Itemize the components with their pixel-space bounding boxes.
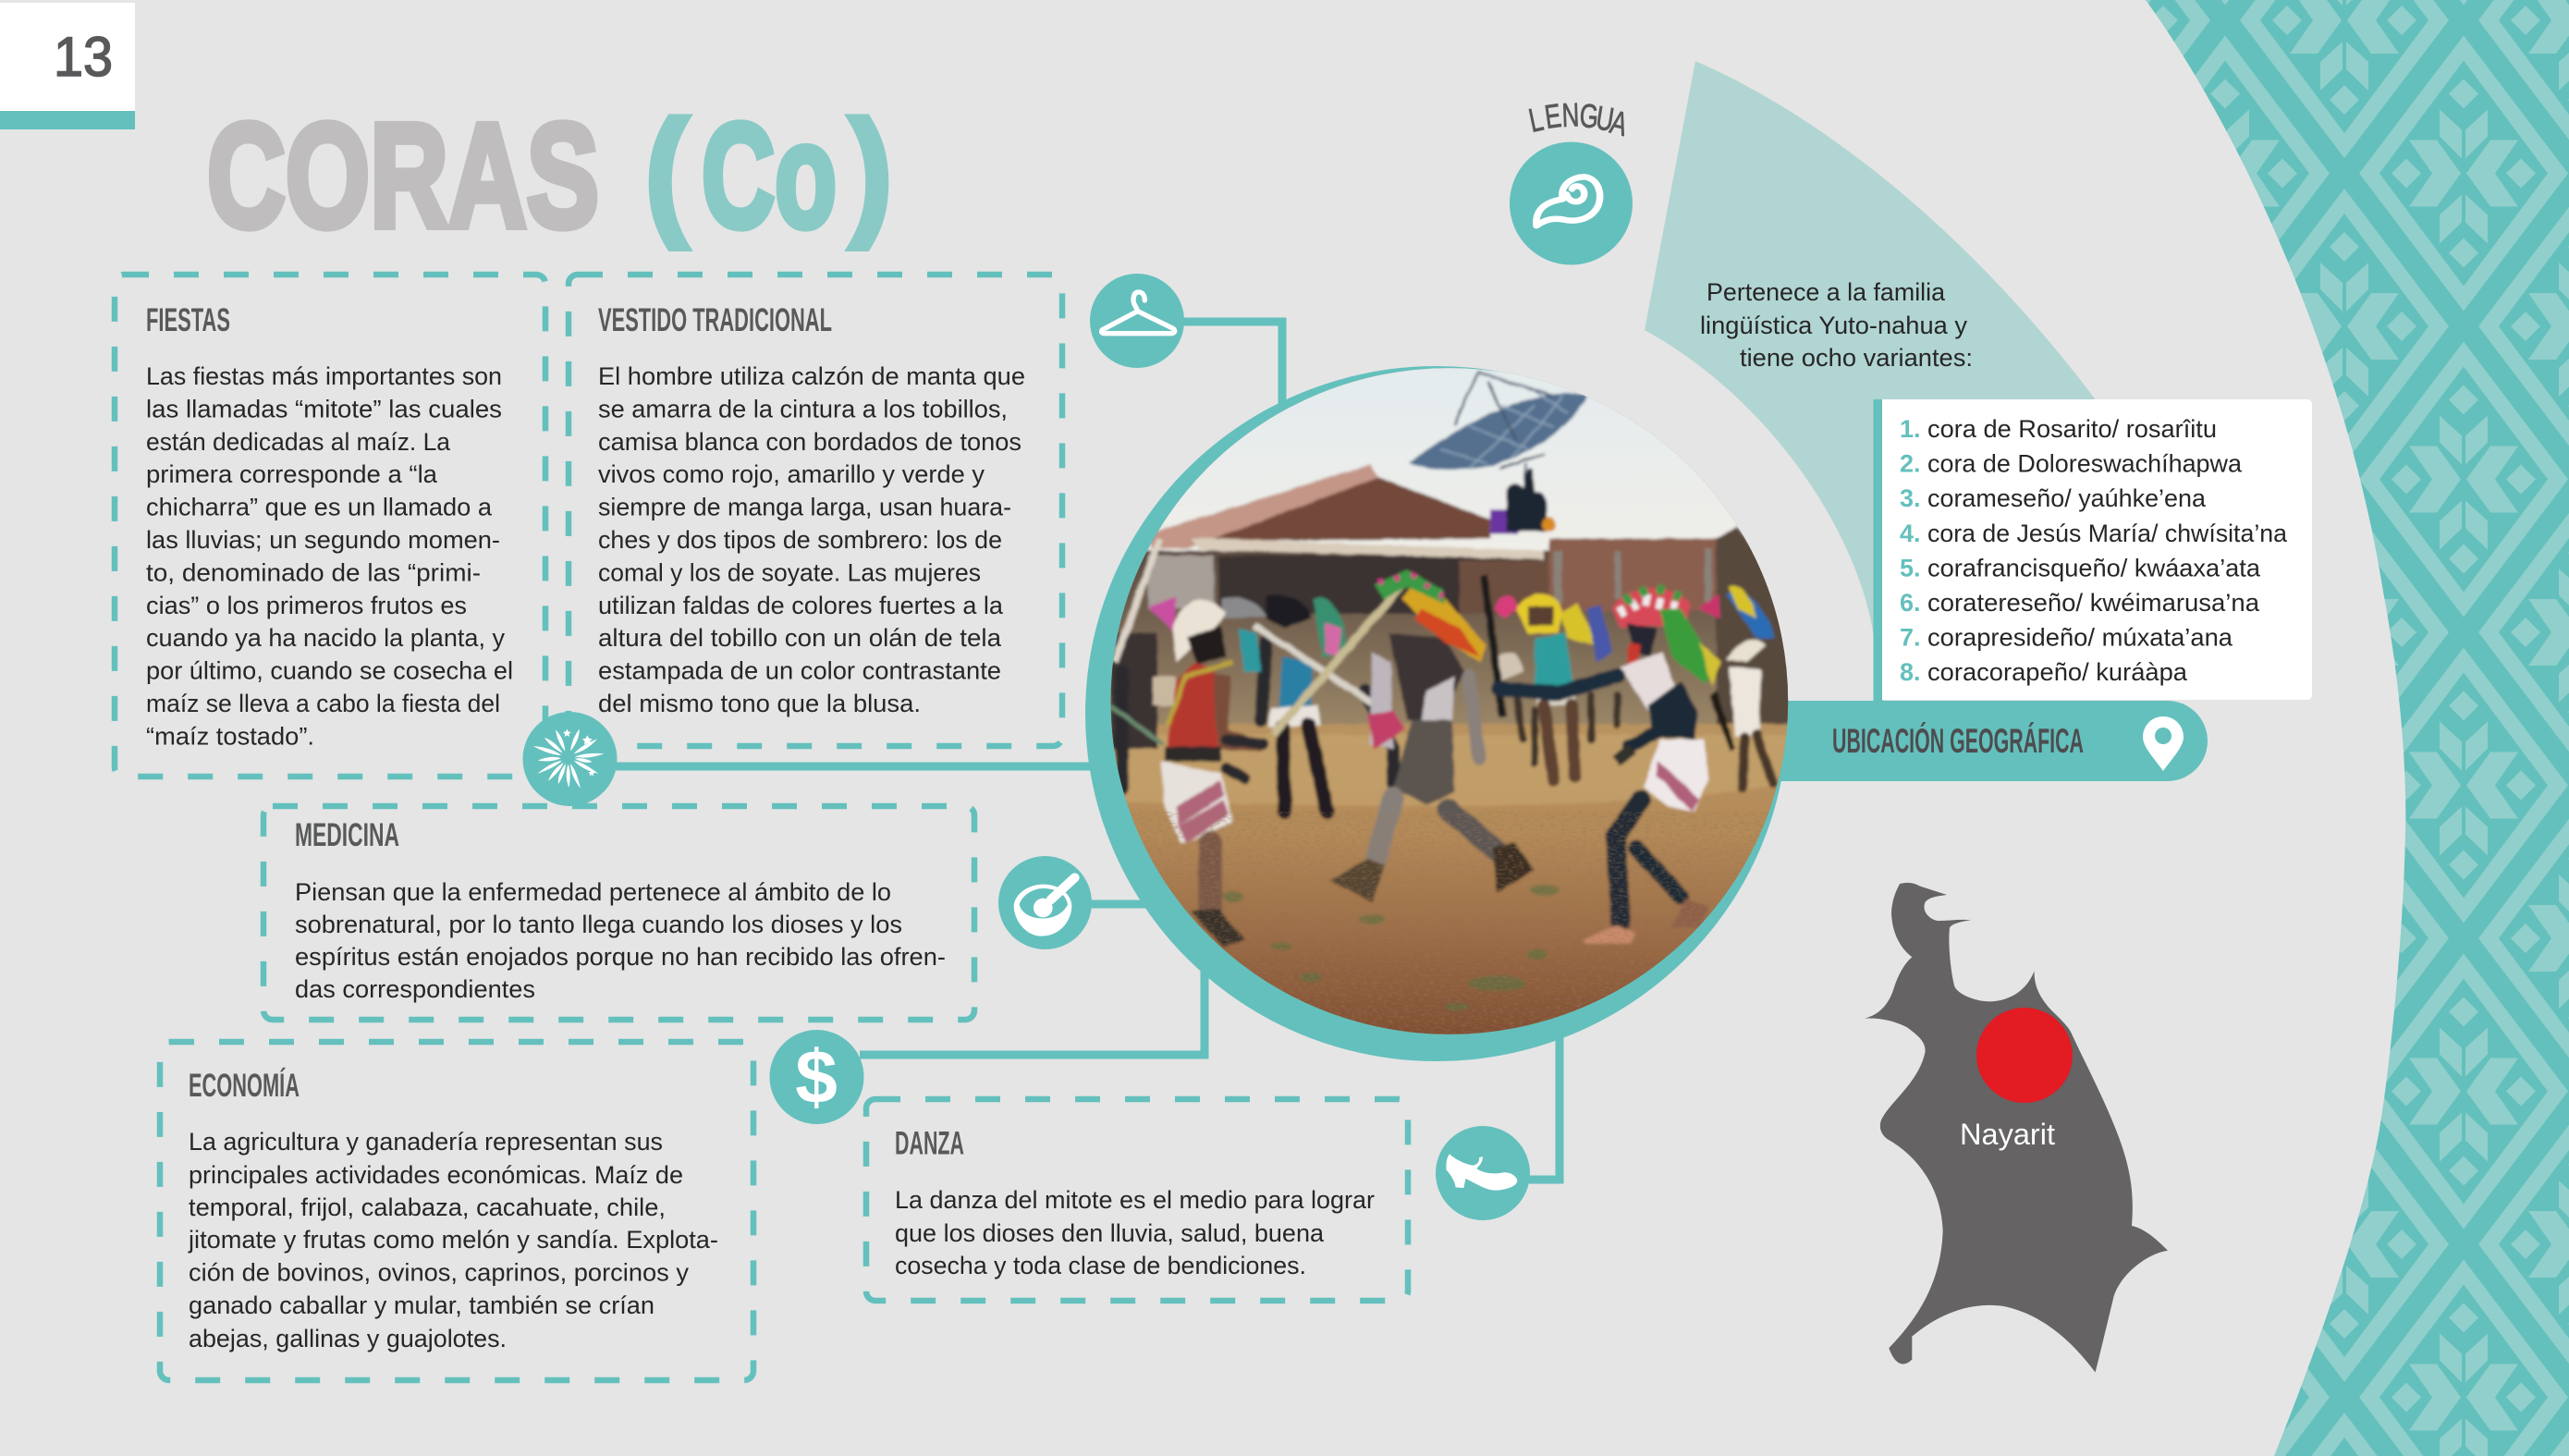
heading: lengua: N xyxy=(1561,96,1580,134)
panel: list of variants: corafrancisqueño/ kwáaxa’ata xyxy=(1927,554,2261,581)
photo ring xyxy=(1085,366,1788,1061)
body text: economía: La agricultura y ganadería representan sus xyxy=(189,1128,663,1156)
heading: lengua: G xyxy=(1578,97,1599,135)
heading: fiestas: FIESTAS xyxy=(146,302,230,338)
heading: lengua: E xyxy=(1543,97,1563,136)
panel: list of variants: coratereseño/ kwéimarusa’na xyxy=(1927,589,2260,617)
icon: heeled shoe xyxy=(1436,1126,1530,1220)
body text: danza: La danza del mitote es el medio para lograr xyxy=(895,1186,1375,1214)
panel: list of variants xyxy=(1873,399,2312,701)
page number tab xyxy=(0,3,135,129)
body text: economía: ción de bovinos, ovinos, caprinos, porcinos y xyxy=(189,1259,690,1287)
body text: economía xyxy=(188,1128,718,1352)
body text: fiestas: las llamadas “mitote” las cuales xyxy=(146,395,502,422)
icon: location pin xyxy=(2143,716,2184,771)
panel: danza xyxy=(866,1099,1408,1301)
panel: list of variants: coracorapeño/ kuráàpa xyxy=(1927,658,2188,686)
title: CORAS xyxy=(207,92,599,258)
background crowd xyxy=(1110,633,1157,749)
panel: list of variants: 2. xyxy=(1900,450,1921,478)
body text: economía: temporal, frijol, calabaza, cacahuate, chile, xyxy=(189,1193,666,1221)
heading: medicina: MEDICINA xyxy=(295,817,399,853)
body text: medicina: sobrenatural, por lo tanto llega cuando los dioses y los xyxy=(295,911,902,938)
ground tufts xyxy=(1222,885,1560,1010)
body text: fiestas: están dedicadas al maíz. La xyxy=(146,428,451,456)
panel: medicina xyxy=(263,806,974,1020)
body text: fiestas: primera corresponde a “la xyxy=(146,460,438,488)
body text: danza: cosecha y toda clase de bendiciones. xyxy=(895,1252,1306,1279)
text: lengua intro xyxy=(1700,278,1973,372)
panel: list of variants: 3. xyxy=(1900,484,1921,512)
body text: fiestas: por último, cuando se cosecha el xyxy=(146,657,513,685)
body text: vestido: se amarra de la cintura a los tobillos, xyxy=(598,395,1008,422)
text: lengua intro: lingüística Yuto-nahua y xyxy=(1700,312,1968,339)
centre man xyxy=(1388,633,1464,725)
body text: economía: principales actividades económicas. Maíz de xyxy=(189,1161,683,1189)
sticks xyxy=(1115,539,1160,662)
connector lines xyxy=(610,322,1560,1180)
panel: list of variants: 4. xyxy=(1900,520,1921,547)
title: ( xyxy=(645,92,688,250)
panel: list of variants: 7. xyxy=(1900,624,1921,652)
heading: economía: ECONOMÍA xyxy=(189,1067,300,1104)
heading: danza: DANZA xyxy=(895,1126,964,1161)
panel: list of variants: 8. xyxy=(1900,658,1921,686)
heading: lengua xyxy=(1525,96,1632,143)
body text: fiestas: maíz se lleva a cabo la fiesta del xyxy=(146,690,500,717)
left man xyxy=(1172,599,1226,662)
panel: vestido tradicional xyxy=(569,275,1062,746)
heading: lengua: A xyxy=(1607,104,1632,143)
body text: vestido: estampada de un color contrastante xyxy=(598,657,1001,685)
heading: lengua: L xyxy=(1525,101,1547,140)
body text: vestido: vivos como rojo, amarillo y verde y xyxy=(598,460,985,488)
body text: fiestas: Las fiestas más importantes son xyxy=(146,362,502,390)
body text: fiestas: to, denominado de las “primi- xyxy=(146,558,481,586)
body text: fiestas: “maíz tostado”. xyxy=(146,722,314,750)
body text: danza: que los dioses den lluvia, salud, buena xyxy=(895,1219,1325,1247)
text: lengua intro: Pertenece a la familia xyxy=(1707,278,1946,306)
body text: fiestas: cuando ya ha nacido la planta, y xyxy=(146,624,506,652)
body text: vestido: utilizan faldas de colores fuertes a la xyxy=(598,592,1004,619)
right dancer xyxy=(1612,588,1691,628)
icon: mortar and pestle xyxy=(998,856,1092,949)
icon: dollar sign: $ xyxy=(795,1035,838,1120)
icon: dollar sign xyxy=(769,1030,863,1124)
body text: vestido: del mismo tono que la blusa. xyxy=(598,690,921,717)
map label: Nayarit xyxy=(1960,1118,2055,1151)
title: ) xyxy=(850,92,892,250)
body text: vestido: ches y dos tipos de sombrero: los de xyxy=(598,526,1002,554)
photo: mitote dancers xyxy=(1092,352,1808,1039)
panel: list of variants: 6. xyxy=(1900,589,1921,617)
title: Co xyxy=(702,92,837,258)
panel: fiestas xyxy=(115,275,545,777)
body text: medicina xyxy=(295,878,946,1003)
icon: speech swirl xyxy=(1510,142,1633,264)
body text: danza xyxy=(895,1186,1375,1279)
panel: list of variants: cora de Doloreswachíhapwa xyxy=(1927,450,2243,478)
body text: vestido xyxy=(598,362,1025,717)
body text: vestido: siempre de manga larga, usan huara- xyxy=(598,494,1011,521)
panel: list of variants: 5. xyxy=(1900,554,1921,581)
icon: hanger xyxy=(1090,274,1184,368)
location bar: UBICACIÓN GEOGRÁFICA xyxy=(1832,721,2084,760)
map marker xyxy=(1976,1008,2073,1103)
location bar xyxy=(1756,701,2208,781)
body text: medicina: das correspondientes xyxy=(295,975,535,1003)
panel: list of variants: corameseño/ yaúhke’ena xyxy=(1927,484,2207,512)
body text: vestido: altura del tobillo con un olán de tela xyxy=(598,624,1002,652)
panel: economía xyxy=(160,1042,753,1380)
panel: list of variants: cora de Jesús María/ chwísita’na xyxy=(1927,520,2288,547)
body text: medicina: Piensan que la enfermedad pertenece al ámbito de lo xyxy=(295,878,891,906)
body text: vestido: comal y los de soyate. Las mujeres xyxy=(598,558,981,586)
body text: medicina: espíritus están enojados porque no han recibido las ofren- xyxy=(295,943,946,971)
body text: vestido: camisa blanca con bordados de tonos xyxy=(598,428,1021,456)
body text: fiestas: chicharra” que es un llamado a xyxy=(146,494,493,521)
heading: vestido tradicional: VESTIDO TRADICIONAL xyxy=(598,302,832,338)
body text: economía: jitomate y frutas como melón y sandía. Explota- xyxy=(188,1226,718,1254)
body text: economía: ganado caballar y mular, también se crían xyxy=(189,1291,654,1319)
map: Nayarit xyxy=(1865,883,2168,1372)
icon: fireworks xyxy=(523,712,618,806)
panel: list of variants: 1. xyxy=(1900,415,1921,443)
panel: list of variants: cora de Rosarito/ rosarîitu xyxy=(1927,415,2217,443)
body text: fiestas xyxy=(146,362,513,750)
body text: economía: abejas, gallinas y guajolotes. xyxy=(189,1325,507,1352)
body text: fiestas: cias” o los primeros frutos es xyxy=(146,592,467,619)
page number tab: 13 xyxy=(54,26,113,88)
heading: lengua: U xyxy=(1594,99,1617,139)
text: lengua intro: tiene ocho variantes: xyxy=(1740,344,1973,372)
panel: list of variants: corapresideño/ múxata’ana xyxy=(1927,624,2233,652)
body text: fiestas: las lluvias; un segundo momen- xyxy=(146,526,500,554)
body text: vestido: El hombre utiliza calzón de manta que xyxy=(598,362,1025,390)
language fan shape xyxy=(1645,61,2097,703)
